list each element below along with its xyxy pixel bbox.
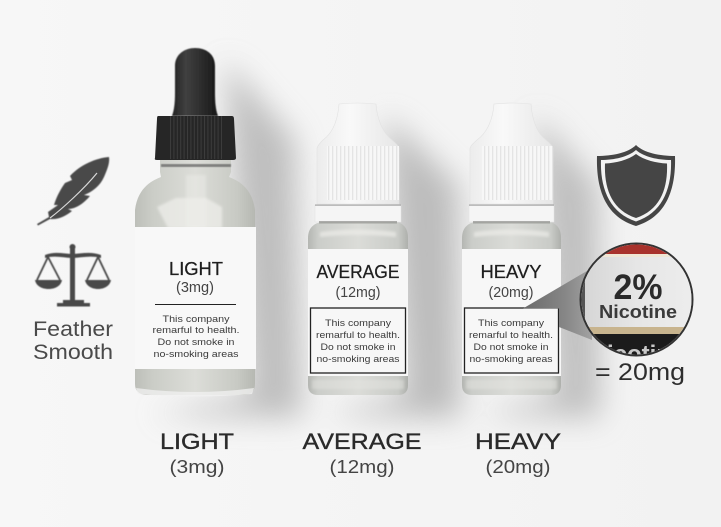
white cap [315, 103, 401, 224]
text: Feather Smooth [33, 317, 113, 364]
label: AVERAGE [316, 262, 400, 282]
label: HEAVY [480, 262, 542, 282]
caption: light [160, 429, 234, 477]
caption: heavy: HEAVY [475, 429, 561, 454]
label: no-smoking areas [316, 354, 400, 365]
label: remarful to health. [469, 330, 553, 341]
bottle shadows [150, 60, 600, 418]
bottle: average [308, 103, 408, 395]
white cap [469, 103, 554, 224]
label: This company [478, 318, 544, 329]
icon: balance scale [35, 244, 111, 306]
label [135, 227, 256, 369]
label: (12mg) [336, 285, 380, 301]
label: Do not smoke in [320, 342, 396, 353]
label [308, 249, 408, 376]
label: no-smoking areas [470, 354, 553, 365]
caption: heavy: (20mg) [486, 457, 550, 477]
dropper collar [155, 116, 236, 160]
label [462, 249, 561, 376]
label: no-smoking areas [154, 349, 239, 360]
caption: light: LIGHT [160, 429, 234, 454]
label: Do not smoke in [474, 342, 548, 353]
text: Feather Smooth: Feather [33, 317, 113, 341]
caption: heavy [475, 429, 561, 477]
label: (20mg) [488, 285, 534, 301]
bottle: heavy [462, 103, 561, 395]
callout: magnifier: 2% [614, 268, 662, 307]
bottle: light dropper [135, 48, 256, 396]
label: Do not smoke in [158, 337, 234, 348]
glass bottle [308, 222, 408, 395]
magnifier cone [523, 268, 592, 340]
dropper bulb [172, 48, 218, 116]
label: remarful to health. [152, 325, 240, 336]
label: This company [162, 314, 230, 325]
text: = 20mg: = 20mg [595, 359, 685, 386]
caption: average: (12mg) [330, 457, 394, 477]
glass bottle [135, 160, 255, 395]
label: remarful to health. [316, 330, 400, 341]
callout: magnifier [523, 244, 696, 368]
caption: average: AVERAGE [302, 429, 422, 454]
text: Feather Smooth: Smooth [33, 340, 113, 364]
callout: magnifier: Nicotine [599, 302, 677, 322]
caption: light: (3mg) [170, 457, 224, 477]
label: (3mg) [176, 280, 214, 296]
icon: feather [37, 157, 109, 226]
label: This company [325, 318, 391, 329]
icon: shield [597, 145, 675, 226]
caption: average [302, 429, 422, 477]
glass bottle [462, 222, 561, 395]
callout: magnifier: Nicotine [590, 341, 684, 368]
label: LIGHT [169, 259, 223, 279]
